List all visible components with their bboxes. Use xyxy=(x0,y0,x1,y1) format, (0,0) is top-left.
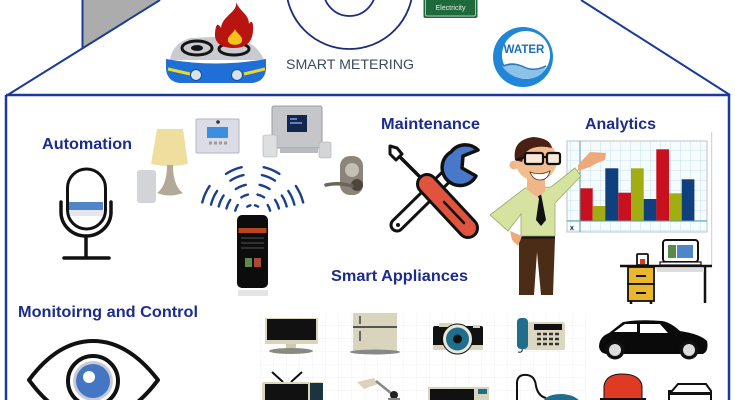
glasses xyxy=(516,153,560,164)
wrench head xyxy=(442,145,478,186)
icon: screwdriver and wrench xyxy=(390,145,478,228)
tie xyxy=(536,194,546,226)
label: smart metering: SMART METERING xyxy=(286,57,414,72)
shirt and arms xyxy=(490,168,581,236)
icon: printer xyxy=(669,384,711,400)
trousers xyxy=(519,238,555,295)
icon: car xyxy=(599,320,708,360)
icon: water badge: WATER xyxy=(504,44,545,56)
chart: analytics bars: x xyxy=(570,225,574,232)
icon: smartphone xyxy=(237,215,268,296)
icon: office desk with laptop xyxy=(620,240,712,304)
icon: microwave xyxy=(428,387,489,400)
hands xyxy=(578,152,606,171)
icon: lamp xyxy=(151,129,188,196)
head xyxy=(527,178,545,197)
wrench handle xyxy=(397,170,453,225)
icon: security panel xyxy=(263,106,331,158)
icon: door sensor xyxy=(137,170,156,203)
screwdriver shaft xyxy=(398,155,428,185)
panel: appliances grid background xyxy=(258,313,586,400)
icon: smart meter dial xyxy=(286,0,413,49)
flame xyxy=(215,2,253,48)
icon: vacuum cleaner xyxy=(517,375,580,400)
icon: monitor xyxy=(265,318,318,354)
icon: camera xyxy=(433,323,483,354)
screwdriver handle xyxy=(427,184,468,228)
house wall frame xyxy=(6,95,729,400)
heading: maintenance: Maintenance xyxy=(381,116,480,133)
icon: refrigerator xyxy=(350,313,400,354)
icon: electricity sign: Electricity xyxy=(436,5,466,12)
illustration: presenter man xyxy=(490,137,606,295)
chimney xyxy=(82,0,159,48)
icon: water badge xyxy=(493,27,553,87)
icon: telephone xyxy=(517,318,565,352)
icon: thermostat xyxy=(196,119,239,153)
chart: analytics bars xyxy=(567,132,712,266)
heading: automation: Automation xyxy=(42,136,132,153)
heading: smart appliances: Smart Appliances xyxy=(331,268,468,285)
icon: electricity sign xyxy=(424,0,478,18)
heading: monitoring and control: Monitoirng and Control xyxy=(18,304,198,321)
icon: retro television xyxy=(262,372,323,400)
icon: red armchair xyxy=(600,374,646,400)
icon: door lock xyxy=(326,156,363,195)
heading: analytics: Analytics xyxy=(585,116,656,133)
icon: hand blender xyxy=(357,378,400,399)
roof xyxy=(6,0,730,96)
icon: gas stove xyxy=(166,2,266,83)
icon: eye xyxy=(29,341,158,400)
icon: wireless signal waves xyxy=(202,167,304,216)
icon: microphone xyxy=(61,169,111,258)
